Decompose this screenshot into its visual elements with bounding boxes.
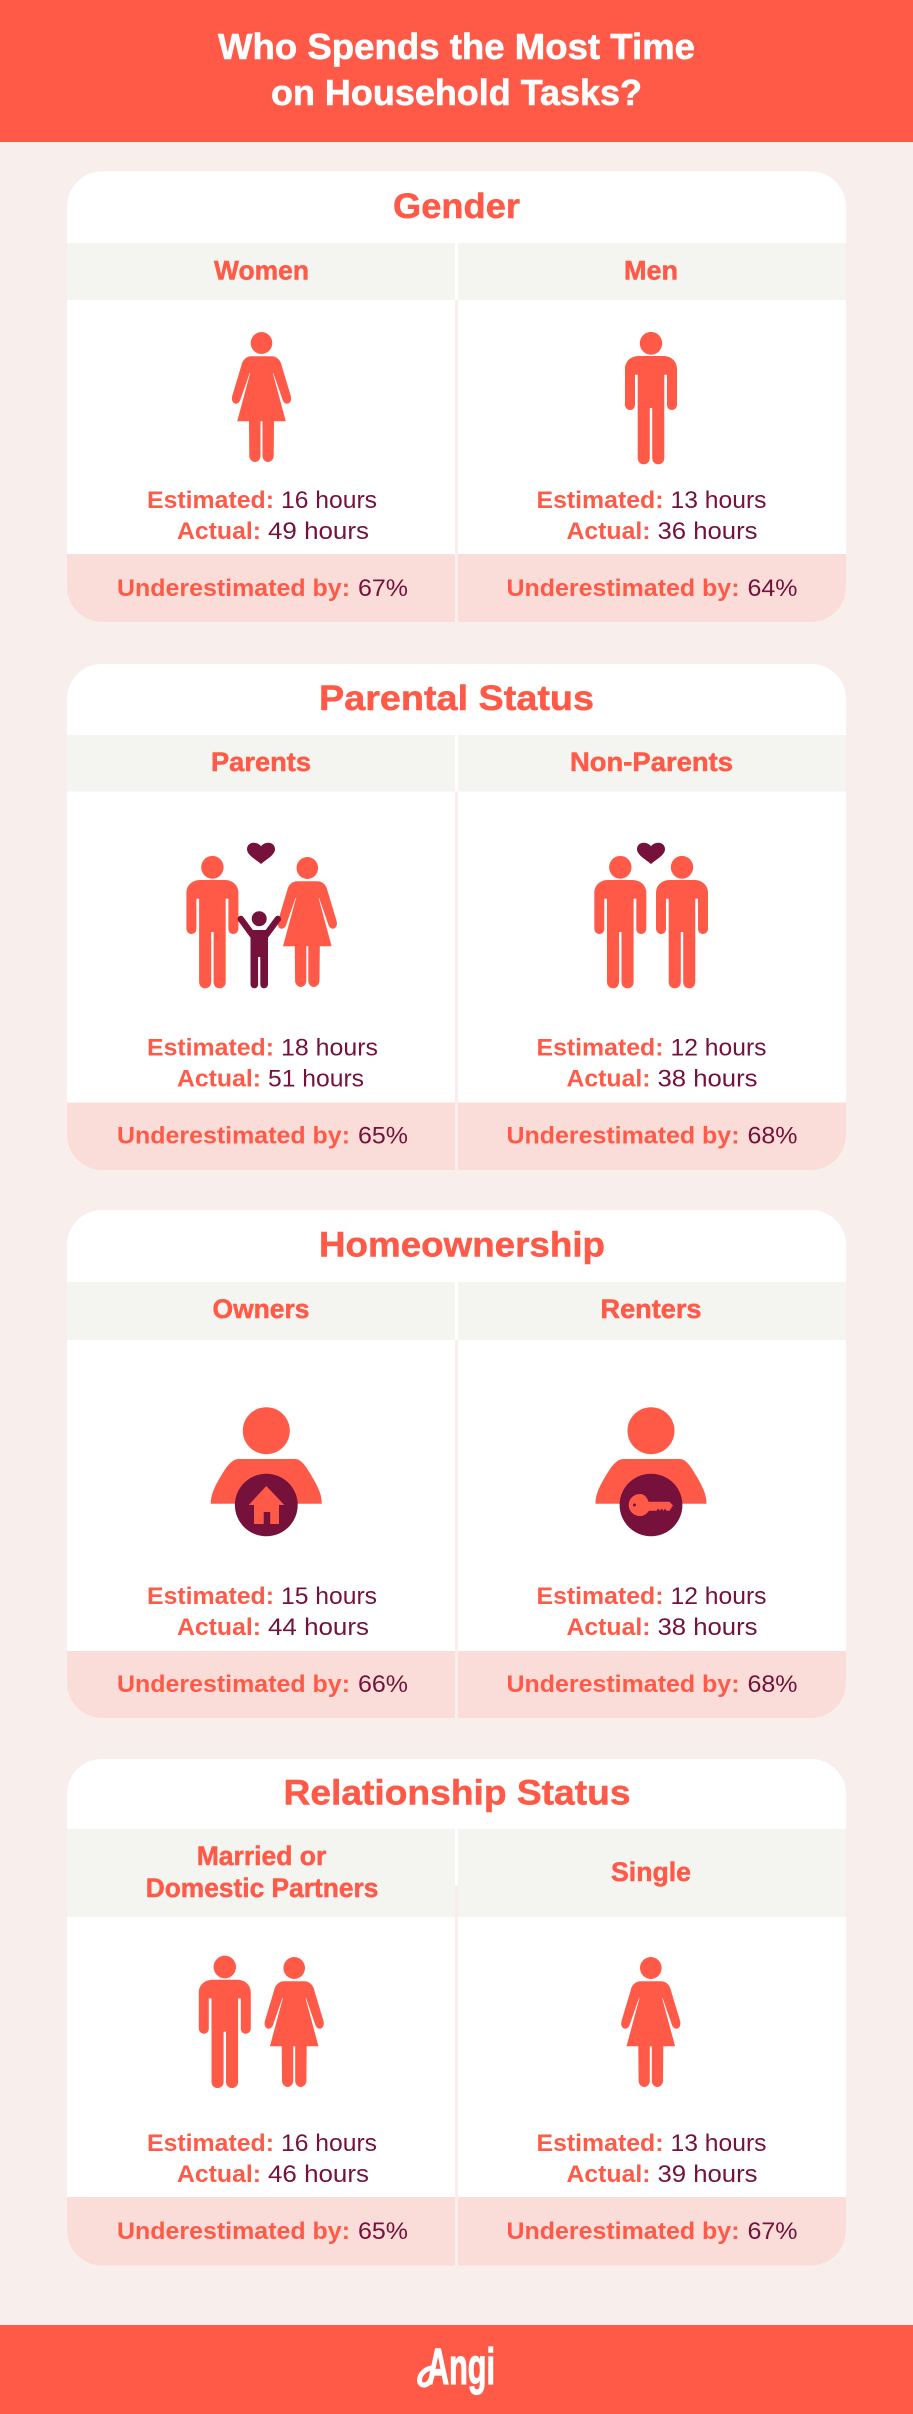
callout: owners underestimated: Underestimated by: — [117, 1671, 350, 1698]
title: Who Spends the Most Time — [218, 26, 695, 67]
stats: renters: 38 hours — [658, 1614, 758, 1641]
stats: married or domestic partners: Estimated: — [147, 2130, 274, 2157]
icon: couple with heart — [594, 843, 708, 988]
stats: owners: Estimated: — [147, 1583, 274, 1610]
callout: non-parents underestimated: Underestimated by: — [506, 1122, 740, 1150]
callout: renters underestimated: 68% — [748, 1671, 798, 1698]
callout: women underestimated: Underestimated by: — [117, 575, 350, 602]
column heading: owners: Owners — [212, 1294, 310, 1324]
footer banner — [0, 2325, 913, 2414]
icon: renter with key — [596, 1407, 706, 1536]
stats: men: Actual: — [566, 518, 650, 545]
stats: non-parents: Actual: — [566, 1066, 650, 1092]
stats: single: 39 hours — [658, 2161, 758, 2188]
callout: owners underestimated: 66% — [358, 1671, 408, 1698]
callout: men underestimated: Underestimated by: — [506, 575, 740, 602]
stats: single: 13 hours — [670, 2130, 766, 2157]
column heading: non-parents: Non-Parents — [570, 747, 733, 777]
callout: married underestimated: Underestimated by: — [117, 2218, 350, 2245]
panel: homeownership — [67, 1210, 846, 1718]
column heading: married or domestic partners — [146, 1841, 378, 1903]
stats: married or domestic partners: 16 hours — [281, 2130, 377, 2157]
icon: owner with house — [211, 1407, 322, 1536]
stats: men: Estimated: — [536, 487, 664, 514]
heading: homeownership: Homeownership — [319, 1226, 605, 1264]
stats: women: Estimated: — [147, 487, 274, 514]
stats: men: 13 hours — [670, 487, 766, 514]
icon: woman — [232, 332, 291, 462]
logo: Angi: Angi — [427, 2338, 495, 2395]
stats: married or domestic partners: Actual: — [177, 2161, 261, 2188]
panel: parental status — [67, 664, 846, 1170]
stats: non-parents — [536, 1034, 766, 1092]
stats: non-parents: Estimated: — [536, 1034, 664, 1062]
stats: single — [536, 2130, 766, 2188]
callout: single underestimated: Underestimated by: — [506, 2218, 740, 2245]
heading: gender: Gender — [393, 187, 520, 226]
stats: renters: Estimated: — [536, 1583, 664, 1610]
icon: married couple — [199, 1956, 324, 2088]
stats: parents: 51 hours — [268, 1066, 364, 1092]
stats: owners: 15 hours — [281, 1583, 377, 1610]
stats: owners: Actual: — [177, 1614, 261, 1641]
icon: family with child and heart — [186, 843, 337, 988]
icon: man — [625, 332, 677, 464]
callout: renters underestimated: Underestimated by: — [506, 1671, 740, 1698]
stats: married or domestic partners: 46 hours — [268, 2161, 369, 2188]
stats: owners — [147, 1583, 377, 1641]
heading: relationship status: Relationship Status — [284, 1774, 630, 1812]
stats: women: 49 hours — [268, 518, 369, 545]
callout: women underestimated: 67% — [358, 575, 408, 602]
panel: gender — [67, 172, 846, 622]
title: on Household Tasks? — [271, 72, 642, 113]
stats: owners: 44 hours — [268, 1614, 369, 1641]
logo: Angi — [420, 2338, 495, 2395]
title — [218, 26, 695, 113]
column heading: women: Women — [214, 256, 309, 286]
stats: women — [147, 487, 377, 545]
column heading: renters: Renters — [600, 1294, 702, 1324]
stats: non-parents: 38 hours — [658, 1066, 758, 1092]
callout: married underestimated: 65% — [358, 2218, 408, 2245]
callout: men underestimated: 64% — [748, 575, 798, 602]
column heading: single: Single — [611, 1857, 691, 1887]
stats: parents: Actual: — [177, 1066, 261, 1092]
callout: single underestimated: 67% — [748, 2218, 798, 2245]
column heading: parents: Parents — [211, 747, 311, 777]
stats: men — [536, 487, 766, 545]
icon: single woman — [621, 1957, 680, 2087]
stats: renters — [536, 1583, 766, 1641]
column heading: men: Men — [624, 256, 678, 286]
stats: single: Actual: — [566, 2161, 650, 2188]
stats: parents: 18 hours — [281, 1034, 378, 1062]
callout: parents underestimated: Underestimated by: — [117, 1122, 350, 1150]
stats: parents — [147, 1034, 378, 1092]
heading: parental status: Parental Status — [319, 679, 594, 718]
stats: men: 36 hours — [658, 518, 758, 545]
stats: parents: Estimated: — [147, 1034, 274, 1062]
stats: renters: Actual: — [566, 1614, 650, 1641]
stats: single: Estimated: — [536, 2130, 664, 2157]
callout: non-parents underestimated: 68% — [748, 1122, 798, 1150]
stats: women: 16 hours — [281, 487, 377, 514]
column heading: married or domestic partners: Married or — [197, 1841, 326, 1871]
stats: renters: 12 hours — [670, 1583, 766, 1610]
column heading: married or domestic partners: Domestic Partners — [146, 1873, 378, 1903]
stats: married or domestic partners — [147, 2130, 377, 2188]
panel: relationship status — [67, 1759, 846, 2266]
stats: women: Actual: — [177, 518, 261, 545]
callout: parents underestimated: 65% — [358, 1122, 408, 1150]
header banner — [0, 0, 913, 142]
stats: non-parents: 12 hours — [670, 1034, 766, 1062]
